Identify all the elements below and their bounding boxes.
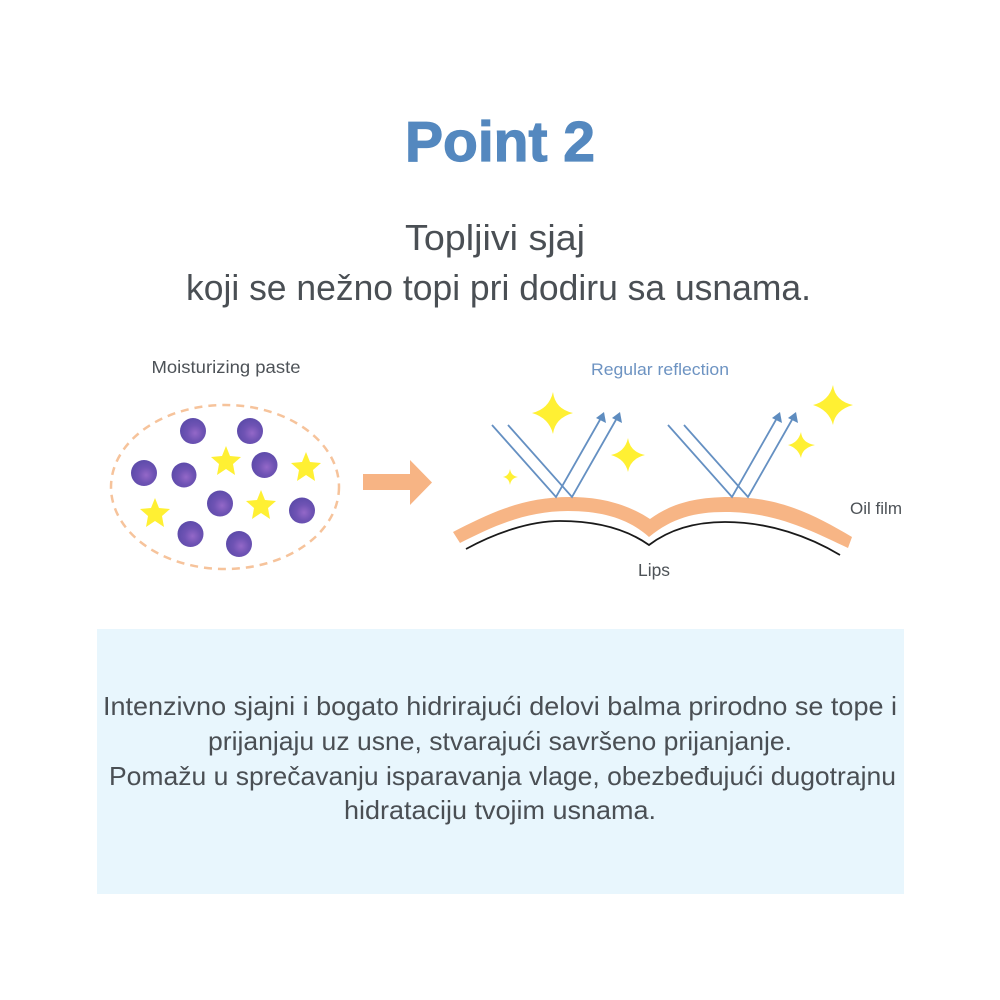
- dashed ellipse: [111, 405, 339, 569]
- incoming and reflected light rays: [492, 418, 793, 497]
- diagram: regular reflection: [453, 360, 902, 580]
- subtitle: koji se nežno topi pri dodiru sa usnama.: [186, 267, 811, 308]
- subtitle: Topljivi sjaj: [405, 217, 585, 258]
- title: Point 2: [405, 110, 595, 174]
- arrow: paste to film: [363, 460, 432, 505]
- label: oil film: Oil film: [850, 500, 902, 518]
- description text: prijanjaju uz usne, stvarajući savršeno prijanjanje.: [208, 726, 792, 756]
- diagram: moisturizing paste: [111, 357, 339, 569]
- oil film: [453, 497, 852, 548]
- description text: Intenzivno sjajni i bogato hidrirajući delovi balma prirodno se tope i: [103, 691, 897, 721]
- purple spheres: [131, 418, 315, 557]
- lips line: [466, 521, 840, 555]
- label: regular reflection: Regular reflection: [591, 360, 729, 379]
- description text: hidrataciju tvojim usnama.: [344, 795, 656, 825]
- description text: Pomažu u sprečavanju isparavanja vlage, obezbeđujući dugotrajnu: [109, 761, 896, 791]
- label: moisturizing paste: Moisturizing paste: [152, 357, 300, 377]
- subtitle: [186, 217, 811, 308]
- arrowheads: [596, 412, 798, 423]
- label: lips: Lips: [638, 560, 670, 580]
- panel: description: [97, 629, 904, 894]
- description text: [103, 691, 897, 825]
- sparkles: [503, 385, 853, 485]
- panel background: [97, 629, 904, 894]
- yellow stars: [140, 446, 321, 527]
